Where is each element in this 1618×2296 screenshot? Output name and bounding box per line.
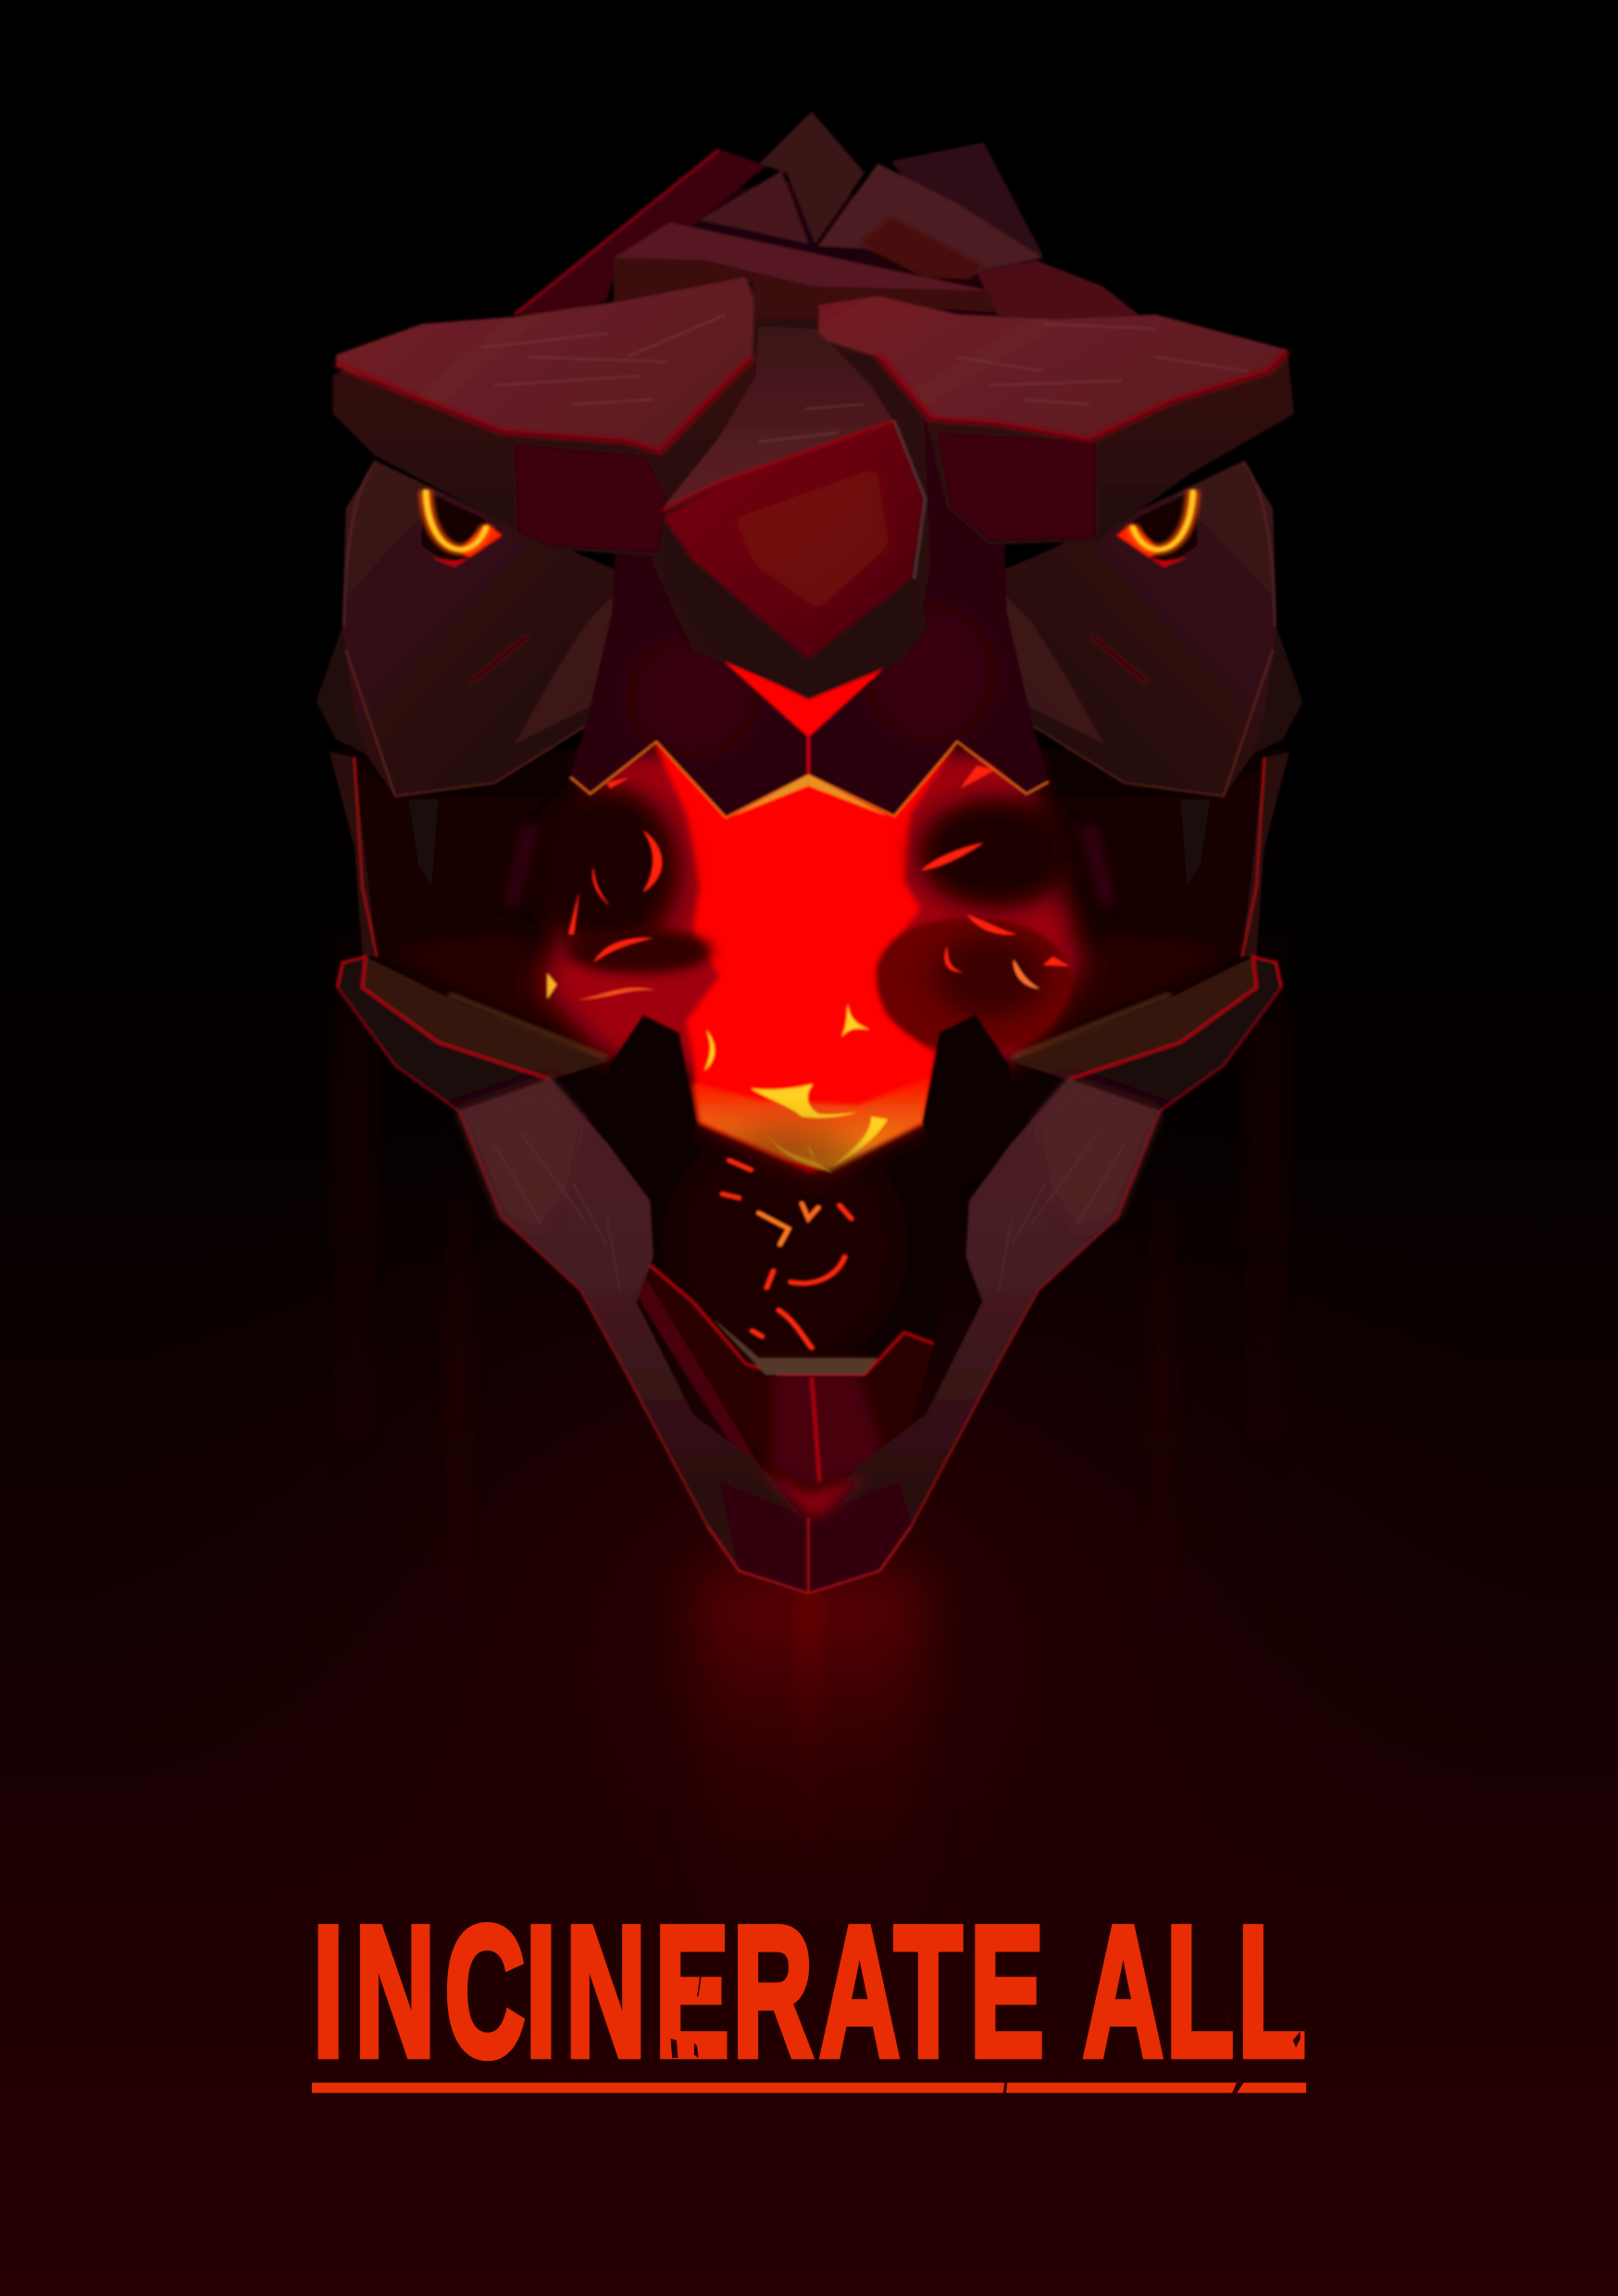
bright molten core [653, 741, 957, 1173]
beak backing [653, 319, 930, 702]
throat glow [673, 1128, 898, 1364]
chin [707, 1465, 912, 1593]
left brow [332, 277, 755, 557]
red haze below head [68, 1018, 1550, 2166]
deep red glow [541, 752, 1083, 1173]
lower lip [637, 1260, 934, 1504]
lower head and mouth [330, 741, 1289, 1593]
throat cracks [723, 1160, 852, 1348]
face red mottling [633, 607, 990, 754]
creature head [316, 111, 1302, 1593]
central face [570, 319, 1049, 817]
molten floor [692, 1078, 930, 1170]
dark rock lumps [534, 785, 1077, 1053]
title: INCINERATE ALL: INCINERATE ALL [313, 1889, 1306, 2096]
right brow [818, 295, 1294, 545]
yellow sparks [704, 1004, 888, 1173]
fangs rim glow [570, 742, 1049, 817]
central beak [663, 326, 927, 699]
jaws [337, 956, 1282, 1593]
light streaks [333, 880, 1287, 1944]
title underline [312, 2083, 1306, 2093]
mouth interior [330, 749, 1288, 1353]
crown shards [515, 111, 1139, 326]
glowing cracks [547, 766, 1069, 1000]
side walls [330, 752, 1289, 1054]
upper head [316, 111, 1302, 817]
distress marks [649, 1976, 1301, 2094]
center fang wedge [732, 775, 888, 816]
eyes [422, 489, 1197, 568]
nose slit glow [725, 662, 891, 737]
cheeks [316, 461, 1302, 797]
